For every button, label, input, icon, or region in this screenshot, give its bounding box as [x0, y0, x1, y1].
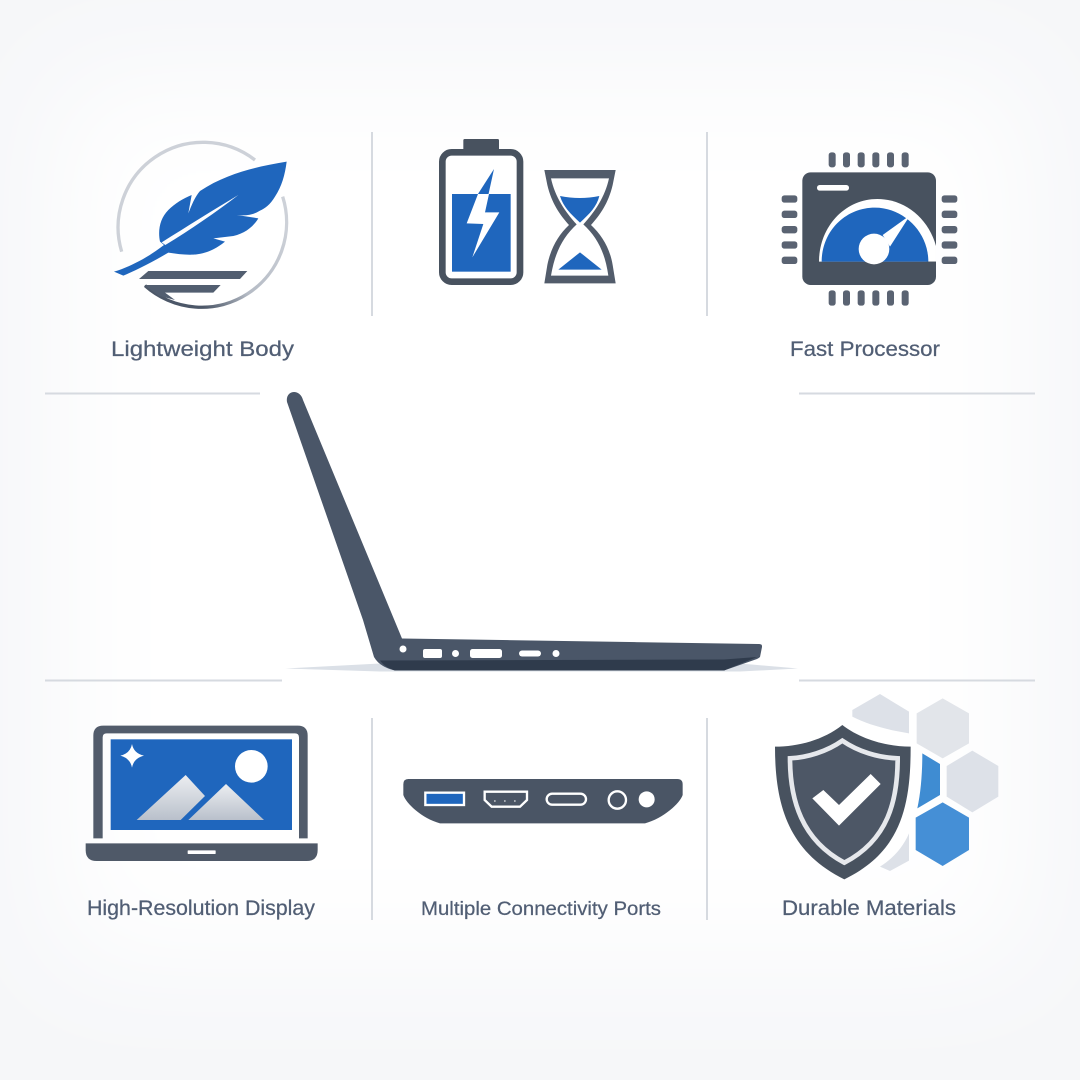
panel: battery life	[442, 139, 616, 283]
icon: processor with gauge	[782, 152, 957, 306]
label: lightweight body: Lightweight Body	[111, 338, 295, 361]
panel: lightweight body	[111, 142, 295, 361]
panel: connectivity ports	[403, 779, 683, 920]
label: connectivity ports: Multiple Connectivity Ports	[421, 898, 661, 920]
panel: fast processor	[782, 152, 957, 361]
label: durable materials: Durable Materials	[782, 897, 956, 920]
laptop shadow	[285, 664, 798, 672]
icon: battery	[442, 139, 520, 282]
icon: shield and hexagons	[775, 694, 998, 879]
icon: hourglass	[544, 170, 616, 283]
laptop ports	[400, 646, 560, 658]
icon: feather in circle	[114, 142, 287, 307]
icon: laptop display	[86, 726, 318, 861]
panel: durable materials	[775, 694, 998, 920]
laptop side view	[285, 392, 798, 672]
panel: high-resolution display	[86, 726, 318, 920]
label: fast processor: Fast Processor	[790, 338, 940, 361]
label: high-resolution display: High-Resolution Display	[87, 897, 315, 920]
laptop lid and base	[287, 392, 762, 670]
icon: port strip	[403, 779, 683, 823]
